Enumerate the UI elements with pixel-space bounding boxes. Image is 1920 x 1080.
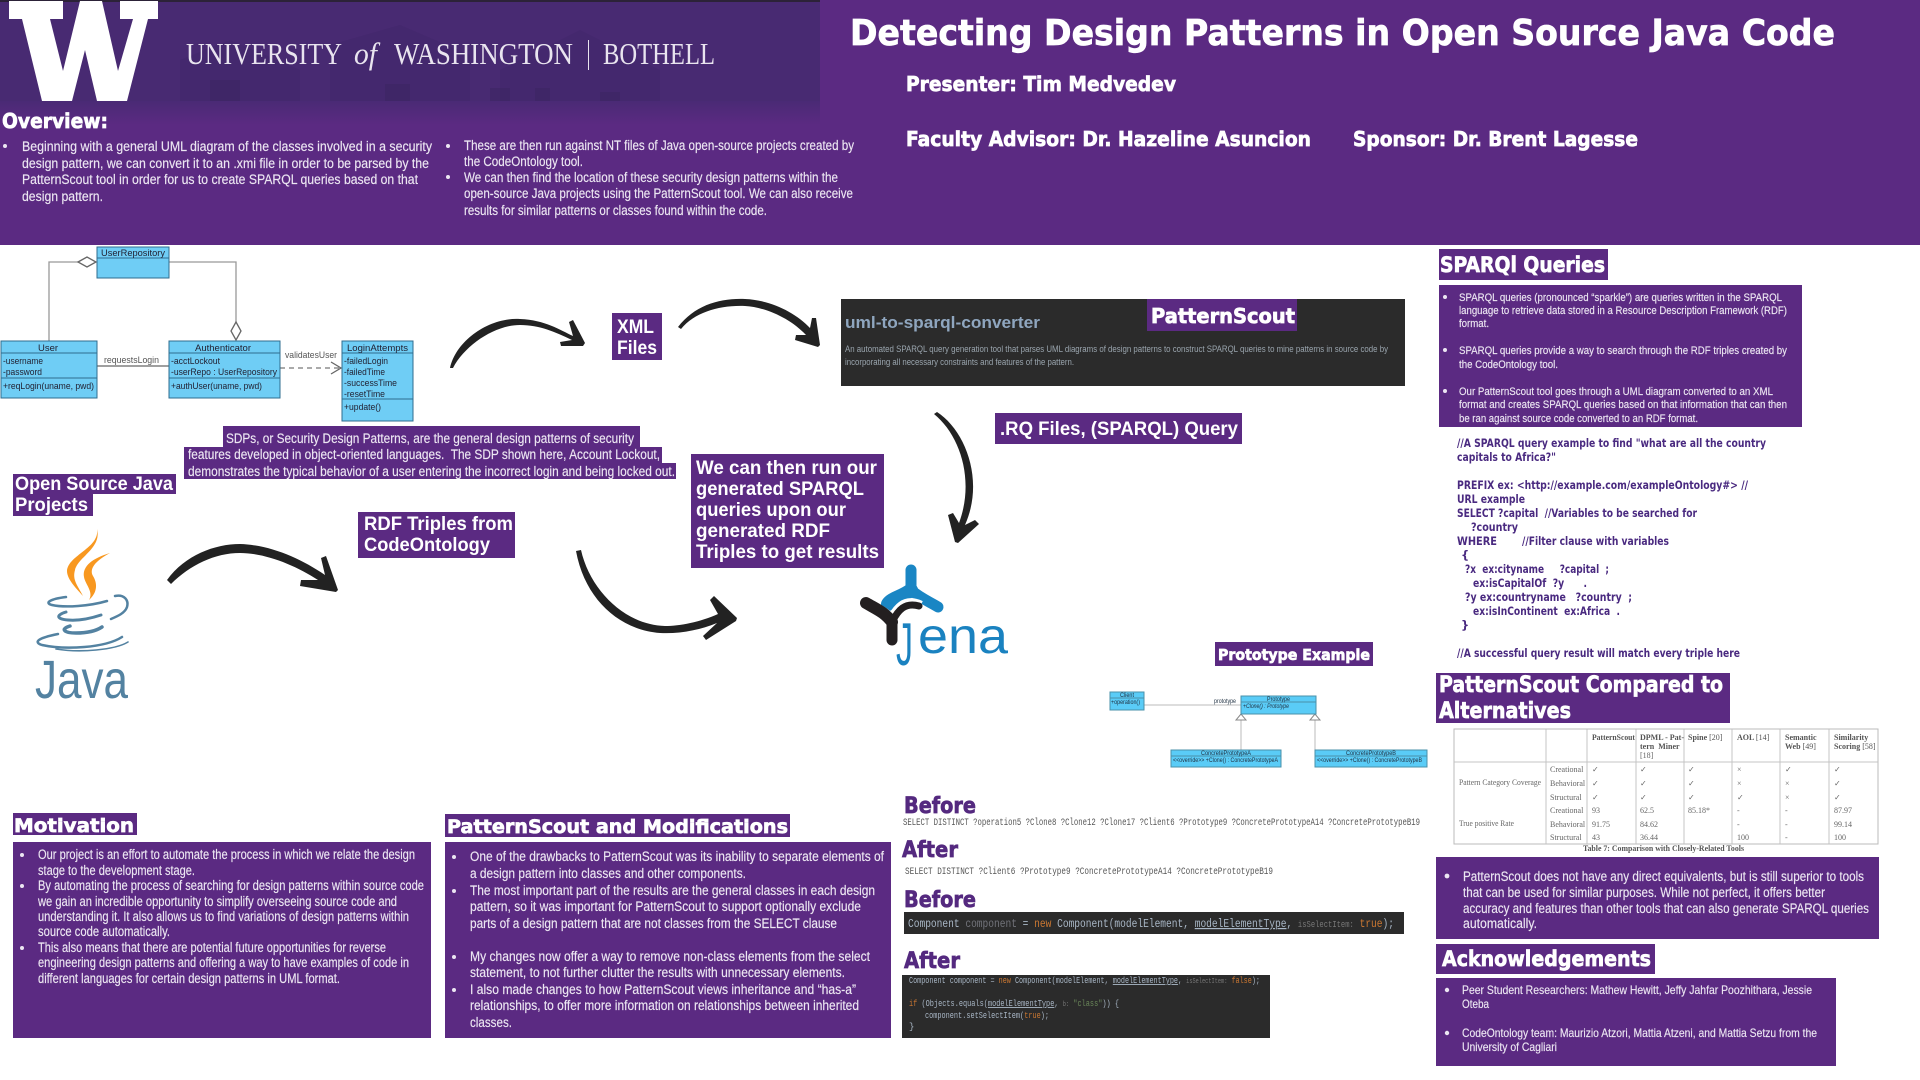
UML class: Prototype: +Clone() : Prototype — [1243, 704, 1290, 710]
account lockout UML diagram — [1, 247, 413, 421]
SPARQL query example: } — [1461, 618, 1469, 632]
code comparison: select before heading: Before — [904, 794, 976, 819]
UML class: User: -password — [3, 367, 42, 378]
PatternScout repository panel: An automated SPARQL query generation tool that parses UML diagrams of design patterns to construct SPARQL queries to mine patterns in source code by — [845, 344, 1388, 354]
overview left column: PatternScout tool in order for us to create SPARQL queries based on that — [22, 172, 418, 187]
UML class: Client: Client — [1120, 693, 1134, 699]
overview right column: We can then find the location of these security design patterns within the — [464, 170, 838, 185]
comparison table: - — [1737, 806, 1740, 815]
panel: motivation: Our project is an effort to automate the process in which we relate the design — [38, 847, 415, 862]
presenter: Presenter: Tim Medvedev — [906, 72, 1176, 96]
PatternScout compared heading — [1436, 673, 1730, 724]
comparison table: Spine [20] — [1688, 733, 1723, 742]
comparison table: - — [1737, 820, 1740, 829]
UML class: Authenticator: +authUser(uname, pwd) — [171, 381, 262, 392]
comparison table: ✓ — [1785, 765, 1792, 774]
comparison table: - — [1785, 833, 1788, 842]
overview right column: These are then run against NT files of Java open-source projects created by — [464, 138, 854, 153]
panel: SPARQL queries: Our PatternScout tool goes through a UML diagram converted to an XML — [1459, 386, 1773, 398]
UML class: Prototype: Prototype — [1267, 697, 1291, 703]
label: PatternScout: PatternScout — [1151, 304, 1295, 328]
panel: SPARQL queries: language to retrieve data stored in a Resource Description Framework (RDF) — [1459, 305, 1787, 317]
arrow: Java to RDF — [167, 544, 338, 592]
comparison table: - — [1785, 820, 1788, 829]
comparison table: × — [1785, 779, 1790, 788]
account lockout UML diagram: validatesUser — [285, 350, 337, 361]
comparison table: ✓ — [1688, 765, 1695, 774]
PatternScout repository panel — [841, 299, 1405, 386]
PatternScout repository panel: uml-to-sparql-converter — [845, 313, 1040, 332]
SDP description callout: features developed in object-oriented languages. The SDP shown here, Account Lockout, — [188, 447, 660, 462]
comparison table: PatternScout — [1592, 733, 1635, 742]
SPARQL query example: { — [1461, 548, 1469, 562]
comparison table: ✓ — [1640, 765, 1647, 774]
comparison table: 62.5 — [1640, 806, 1654, 815]
panel: PatternScout and modifications: I also made changes to how PatternScout views inheritance and “has-a” — [470, 982, 856, 997]
panel: PatternScout and modifications: relationships, to offer more information on relationships between inherited — [470, 998, 859, 1013]
SPARQL query example: //Filter clause with variables — [1522, 534, 1669, 548]
code: java after — [902, 975, 1270, 1038]
comparison table: 93 — [1592, 806, 1600, 815]
overview right column: the CodeOntology tool. — [464, 154, 583, 169]
panel: SPARQL queries: the CodeOntology tool. — [1459, 359, 1558, 371]
comparison table: 43 — [1592, 833, 1600, 842]
panel: PatternScout and modifications: My changes now offer a way to remove non-class elements from the select — [470, 949, 870, 964]
UML class: UserRepository — [97, 247, 169, 278]
panel: motivation: understanding it. It also allows us to find variations of design patterns within — [38, 909, 409, 924]
UML class: Authenticator: -userRepo : UserRepository — [171, 367, 277, 378]
UML class: User: +reqLogin(uname, pwd) — [3, 381, 94, 392]
UML class: User: User — [38, 343, 58, 354]
SPARQL query example: ?y ex:countryname ?country ; — [1465, 590, 1632, 604]
comparison table: AOL [14] — [1737, 733, 1770, 742]
panel: PatternScout and modifications: The most important part of the results are the general classes in each design — [470, 883, 875, 898]
code: java after: if (Objects.equals(modelElementType, b: "class")) { — [909, 999, 1119, 1009]
comparison table: Similarity — [1834, 733, 1868, 742]
arrow: XML to PatternScout — [678, 299, 820, 347]
comparison table: ✓ — [1688, 793, 1695, 802]
panel: comparison summary — [1436, 857, 1879, 939]
panel: PatternScout and modifications: pattern, so it was important for PatternScout to support optionally exclude — [470, 899, 861, 914]
SPARQL query example: //A successful query result will match every triple here — [1457, 646, 1740, 660]
prototype UML diagram: prototype — [1214, 699, 1237, 705]
comparison table: 91.75 — [1592, 820, 1610, 829]
SPARQL query example: ex:isCapitalOf ?y . — [1473, 576, 1587, 590]
university name — [186, 36, 715, 71]
university name: BOTHELL — [603, 36, 715, 71]
comparison table: ✓ — [1592, 765, 1599, 774]
panel: motivation: different languages for certain design patterns in UML format. — [38, 971, 340, 986]
icon: java logo — [35, 529, 129, 710]
comparison table: ✓ — [1592, 779, 1599, 788]
UML class: LoginAttempts: +update() — [344, 402, 381, 413]
comparison table — [1454, 729, 1878, 844]
panel: PatternScout and modifications — [445, 842, 891, 1038]
callout: run queries: generated SPARQL — [696, 479, 864, 500]
UML class: LoginAttempts: -resetTime — [344, 389, 385, 400]
panel: SPARQL queries: format. — [1459, 318, 1489, 330]
faculty advisor: Faculty Advisor: Dr. Hazeline Asuncion — [906, 127, 1311, 151]
panel: motivation: This also means that there are potential future opportunities for reverse — [38, 940, 386, 955]
callout: run queries — [691, 454, 884, 568]
comparison table: tern Miner — [1640, 742, 1680, 751]
code: java before: Component component = new Component(modelElement, modelElementType, isSelectItem: true); — [908, 917, 1394, 931]
comparison table: ✓ — [1834, 793, 1841, 802]
comparison table: 85.18* — [1688, 806, 1710, 815]
UML class: LoginAttempts — [342, 341, 413, 421]
comparison table: × — [1785, 793, 1790, 802]
comparison table: Web [49] — [1785, 742, 1816, 751]
code: java before — [904, 912, 1404, 934]
label: RQ files — [995, 413, 1242, 444]
overview left column: design pattern. — [22, 189, 103, 204]
code comparison: java after heading: After — [904, 949, 960, 974]
PatternScout and modifications heading: PatternScout and Modifications — [447, 816, 788, 838]
callout: run queries: generated RDF — [696, 521, 830, 542]
comparison table: × — [1737, 765, 1742, 774]
UML class: LoginAttempts: -successTime — [344, 378, 397, 389]
icon: UW W logo — [9, 1, 158, 101]
code comparison: select after heading: After — [902, 838, 958, 863]
UML class: ConcretePrototypeA — [1171, 750, 1281, 767]
sponsor: Sponsor: Dr. Brent Lagesse — [1353, 127, 1638, 151]
panel: acknowledgements — [1436, 978, 1836, 1066]
UML class: ConcretePrototypeB — [1315, 750, 1427, 767]
comparison table: True positive Rate — [1459, 819, 1514, 828]
UML class: ConcretePrototypeB: ConcretePrototypeB — [1346, 751, 1396, 757]
comparison table: 100 — [1737, 833, 1749, 842]
panel: motivation: stage to the development stage. — [38, 863, 195, 878]
panel: acknowledgements: University of Cagliari — [1462, 1040, 1557, 1054]
panel: motivation: By automating the process of searching for design patterns within source code — [38, 878, 424, 893]
SPARQL query example: PREFIX ex: <http://example.com/exampleOntology#> // — [1457, 478, 1749, 492]
comparison table: Behavioral — [1550, 820, 1586, 829]
callout: run queries: We can then run our — [696, 458, 878, 479]
prototype UML diagram — [1110, 692, 1427, 767]
comparison table: ✓ — [1592, 793, 1599, 802]
UML class: Client — [1110, 692, 1144, 710]
comparison table: 100 — [1834, 833, 1846, 842]
comparison table: ✓ — [1834, 765, 1841, 774]
code: java after: component.setSelectItem(true); — [925, 1011, 1049, 1021]
label: open source java projects: Open Source Java — [15, 474, 173, 495]
comparison table: ✓ — [1737, 793, 1744, 802]
label: RDF triples: RDF Triples from — [364, 514, 513, 535]
label: RDF triples — [358, 512, 515, 558]
panel: comparison summary: automatically. — [1463, 916, 1537, 931]
code: java after: Component component = new Component(modelElement, modelElementType, isSelectItem: false); — [909, 976, 1260, 986]
overview left column: design pattern, we can convert it to an .xmi file in order to be parsed by the — [22, 156, 429, 171]
panel: motivation: source code automatically. — [38, 924, 170, 939]
comparison table: Pattern Category Coverage — [1459, 778, 1541, 787]
comparison table: 36.44 — [1640, 833, 1658, 842]
UML class: LoginAttempts: -failedLogin — [344, 356, 388, 367]
comparison table: Creational — [1550, 765, 1584, 774]
icon: jena logo: J — [896, 611, 913, 678]
UML class: UserRepository: UserRepository — [101, 248, 165, 259]
university name: UNIVERSITY — [186, 36, 342, 71]
panel: PatternScout and modifications: statement, to not further clutter the results with unnecessary elements. — [470, 965, 845, 980]
acknowledgements heading: Acknowledgements — [1442, 947, 1651, 971]
comparison table: Behavioral — [1550, 779, 1586, 788]
label: RDF triples: CodeOntology — [364, 535, 490, 556]
panel: acknowledgements: Peer Student Researchers: Mathew Hewitt, Jeffy Jahfar Poozhithara, Jessie — [1462, 983, 1812, 997]
comparison table: Structural — [1550, 833, 1582, 842]
panel: PatternScout and modifications: One of the drawbacks to PatternScout was its inability to separate elements of — [470, 849, 884, 864]
SPARQL query example — [1457, 436, 1766, 660]
table caption: Table 7: Comparison with Closely-Related Tools — [1583, 844, 1744, 853]
PatternScout compared heading: PatternScout Compared to — [1439, 673, 1723, 698]
university banner — [0, 0, 820, 101]
SPARQL query example: capitals to Africa?" — [1457, 450, 1556, 464]
panel: motivation: we gain an incredible opportunity to simplify overseeing source code and — [37, 894, 397, 909]
account lockout UML diagram: requestsLogin — [104, 355, 159, 366]
UML class: ConcretePrototypeA: <<override>> +Clone() : ConcretePrototypeA — [1173, 758, 1278, 764]
callout: run queries: Triples to get results — [696, 542, 879, 563]
university name: of — [354, 36, 381, 71]
header band — [0, 0, 1920, 245]
SPARQL query example: WHERE — [1457, 534, 1497, 548]
code: select before: SELECT DISTINCT ?operation5 ?Clone8 ?Clone12 ?Clone17 ?Client6 ?Prototype9 ?ConcretePrototypeA14 ?ConcretePrototypeB19 — [903, 817, 1420, 829]
code: select after: SELECT DISTINCT ?Client6 ?Prototype9 ?ConcretePrototypeA14 ?ConcretePrototypeB19 — [905, 866, 1273, 878]
UML class: ConcretePrototypeB: <<override>> +Clone() : ConcretePrototypeB — [1317, 758, 1422, 764]
panel: comparison summary: that can be used for similar purposes. While not perfect, it offers better — [1463, 885, 1825, 900]
icon: jena logo — [866, 570, 1008, 678]
comparison table: Scoring [58] — [1834, 742, 1876, 751]
panel: comparison summary: PatternScout does not have any direct equivalents, but is still superior to tools — [1463, 869, 1864, 884]
UML class: Prototype — [1241, 696, 1316, 714]
panel: motivation — [13, 842, 431, 1038]
code: java after: } — [909, 1022, 914, 1032]
arrow: PatternScout to Jena — [934, 412, 979, 543]
comparison table: Semantic — [1785, 733, 1817, 742]
SPARQL query example: //A SPARQL query example to find "what are all the country — [1457, 436, 1766, 450]
SPARQL queries heading: SPARQl Queries — [1440, 253, 1605, 277]
UML class: LoginAttempts: -failedTime — [344, 367, 385, 378]
SPARQL query example: ?country — [1471, 520, 1518, 534]
PatternScout repository panel: incorporating all necessary constraints and features of the pattern. — [845, 357, 1074, 367]
panel: SPARQL queries: SPARQL queries provide a way to search through the RDF triples created by — [1459, 345, 1787, 357]
comparison table: ✓ — [1640, 779, 1647, 788]
PatternScout compared heading: Alternatives — [1439, 699, 1571, 724]
overview left column — [3, 139, 432, 204]
comparison table: ✓ — [1688, 779, 1695, 788]
UML class: User: -username — [3, 356, 43, 367]
code comparison: java before heading: Before — [904, 888, 976, 913]
SPARQL query example: ex:isInContinent ex:Africa . — [1473, 604, 1620, 618]
callout: run queries: queries upon our — [696, 500, 847, 521]
comparison table: 87.97 — [1834, 806, 1852, 815]
comparison table: Structural — [1550, 793, 1582, 802]
comparison table: ✓ — [1640, 793, 1647, 802]
panel: SPARQL queries: format and creates SPARQL queries based on that information that can then — [1459, 399, 1787, 411]
comparison table: - — [1785, 806, 1788, 815]
label: prototype example: Prototype Example — [1218, 646, 1370, 664]
overview left column: Beginning with a general UML diagram of the classes involved in a security — [22, 139, 432, 154]
UML class: Client: +operation() — [1111, 700, 1140, 706]
comparison table: DPML - Pat- — [1640, 733, 1684, 742]
panel: motivation: engineering design patterns and offering a way to have examples of code in — [38, 955, 409, 970]
UML class: User — [1, 341, 97, 398]
SDP description callout: demonstrates the typical behavior of a user entering the incorrect login and being locked out. — [188, 464, 675, 479]
comparison table: Creational — [1550, 806, 1584, 815]
panel: PatternScout and modifications: a design pattern into classes and other components. — [470, 866, 746, 881]
SPARQL query example: SELECT ?capital //Variables to be searched for — [1457, 506, 1697, 520]
panel: acknowledgements: Oteba — [1462, 997, 1489, 1011]
UML class: ConcretePrototypeA: ConcretePrototypeA — [1201, 751, 1251, 757]
label: open source java projects — [13, 474, 176, 516]
icon: jena logo: ena — [918, 608, 1008, 664]
SDP description callout — [184, 426, 676, 479]
UML class: Authenticator: Authenticator — [195, 343, 251, 354]
icon: java logo: Java — [35, 650, 129, 710]
panel: SPARQL queries: be ran against source code converted to an RDF format. — [1459, 413, 1698, 425]
overview right column: open-source Java projects using the PatternScout tool. We can also receive — [464, 186, 853, 201]
UML class: Authenticator: -acctLockout — [171, 356, 220, 367]
overview right column — [446, 138, 854, 218]
SDP description callout: SDPs, or Security Design Patterns, are the general design patterns of security — [226, 431, 634, 446]
label: RQ files: .RQ Files, (SPARQL) Query — [1000, 419, 1238, 440]
arrow: RDF to Jena — [576, 550, 737, 640]
overview heading: Overview: — [2, 109, 108, 133]
label: XML files: XML — [617, 317, 654, 338]
panel: acknowledgements: CodeOntology team: Maurizio Atzori, Mattia Atzeni, and Mattia Setzu from the — [1462, 1026, 1817, 1040]
comparison table: 84.62 — [1640, 820, 1658, 829]
comparison table: × — [1737, 779, 1742, 788]
comparison table: ✓ — [1834, 779, 1841, 788]
UML class: LoginAttempts: LoginAttempts — [347, 343, 408, 354]
panel: PatternScout and modifications: classes. — [470, 1015, 512, 1030]
label: XML files — [612, 313, 662, 360]
arrow: UML to XML — [450, 319, 585, 368]
panel: SPARQL queries — [1439, 285, 1802, 427]
overview right column: results for similar patterns or classes found within the code. — [464, 203, 767, 218]
UML class: Authenticator — [169, 341, 280, 398]
motivation heading: Motivation — [14, 815, 134, 837]
title: Detecting Design Patterns in Open Source Java Code — [850, 13, 1835, 54]
panel: PatternScout and modifications: parts of a design pattern that are not classes from the SELECT clause — [470, 916, 837, 931]
university name: WASHINGTON — [394, 36, 573, 71]
comparison table: [18] — [1640, 751, 1654, 760]
label: XML files: Files — [617, 338, 657, 359]
SPARQL query example: URL example — [1457, 492, 1525, 506]
label: open source java projects: Projects — [15, 495, 88, 516]
panel: SPARQL queries: SPARQL queries (pronounced “sparkle”) are queries written in the SPARQL — [1459, 292, 1782, 304]
comparison table: 99.14 — [1834, 820, 1852, 829]
SPARQL query example: ?x ex:cityname ?capital ; — [1465, 562, 1609, 576]
